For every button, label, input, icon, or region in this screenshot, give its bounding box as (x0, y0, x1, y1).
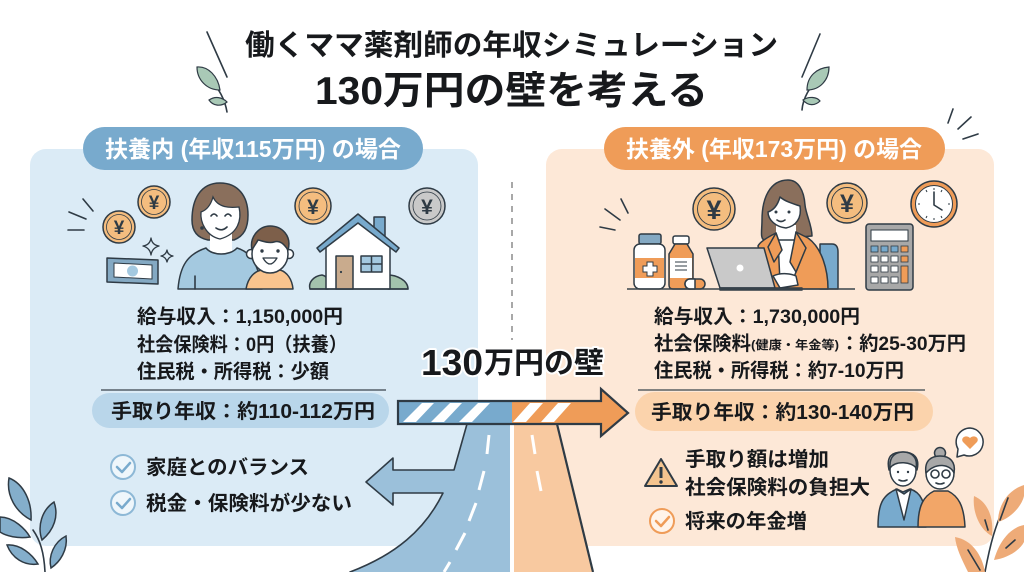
icon: medicine bottle with cross (634, 234, 665, 289)
illustration: right rays (600, 199, 628, 230)
heading pill: right: 扶養外 (年収173万円) の場合 (626, 136, 922, 162)
text block: left income details: 住民税・所得税：少額 (137, 361, 329, 383)
text block: right income details: 給与収入：1,730,000円 (654, 306, 860, 328)
icon: silver yen coin (409, 188, 445, 224)
icon: calculator (866, 224, 913, 290)
text block: right caution (685, 448, 870, 499)
text block: right caution: 手取り額は増加 (685, 448, 829, 471)
decoration: right foliage (955, 485, 1024, 572)
title: 働くママ薬剤師の年収シミュレーション (245, 29, 778, 62)
result pill: right take-home (635, 392, 933, 431)
icon: warning triangle (645, 459, 677, 486)
text block: left income details (137, 306, 347, 383)
result pill: right take-home: 手取り年収：約130-140万円 (651, 401, 914, 424)
result pill: left take-home: 手取り年収：約110-112万円 (111, 400, 375, 423)
text block: right income details: (健康・年金等) (751, 337, 839, 352)
list: left benefits (111, 455, 352, 515)
heading pill: left (83, 127, 423, 170)
heading pill: left: 扶養内 (年収115万円) の場合 (105, 136, 401, 162)
icon: laptop (707, 248, 802, 290)
illustration: elderly couple (878, 448, 965, 527)
icon: silver yen coin: ¥ (421, 196, 433, 219)
left divider (101, 389, 386, 391)
icon: check 2 (111, 491, 135, 515)
text: future pension: 将来の年金増 (685, 510, 807, 533)
result pill: left take-home (92, 393, 389, 428)
illustration: house (310, 214, 408, 289)
heading: 1.3 million yen wall: 130 (421, 342, 483, 383)
decoration: left foliage (0, 478, 66, 572)
illustration: child (246, 226, 294, 289)
text block: right income details: 社会保険料 (654, 333, 751, 355)
icon: heart speech bubble (956, 428, 983, 457)
text block: right income details (654, 306, 966, 382)
icon: banknote (107, 258, 158, 284)
text block: right caution: 社会保険料の負担大 (685, 476, 870, 499)
title (245, 29, 778, 113)
illustration: working woman (758, 180, 828, 289)
text: low taxes: 税金・保険料が少ない (146, 491, 352, 515)
heading: 1.3 million yen wall: 万円の壁 (484, 347, 604, 380)
text block: left income details: 社会保険料：0円（扶養） (137, 334, 347, 356)
icon: yen coin 2 (103, 211, 135, 243)
illustration: mother (178, 183, 262, 289)
icon: medicine bottle with label (669, 236, 693, 289)
illustration: left rays (68, 199, 93, 230)
text: balance: 家庭とのバランス (146, 456, 309, 479)
icon: yen coin 2: ¥ (114, 218, 125, 239)
icon: large yen coin (693, 188, 735, 230)
heading pill: right (604, 127, 945, 170)
panel: left background (30, 149, 478, 546)
decoration: rays top right (948, 109, 978, 139)
arrow: striped barrier (398, 389, 628, 436)
icon: large yen coin: ¥ (706, 195, 722, 225)
text block: right income details: ：約25-30万円 (840, 333, 966, 355)
heading: 1.3 million yen wall (421, 342, 604, 383)
road: left blue with branching arrow (350, 424, 510, 572)
center dashed divider (511, 182, 513, 340)
decoration: title leaves left (197, 32, 227, 112)
panel: right background (546, 149, 994, 546)
icon: yen coin 1: ¥ (149, 193, 160, 214)
title: 130万円の壁を考える (315, 70, 708, 113)
desk line (627, 288, 855, 290)
icon: check 1 (111, 455, 135, 479)
right divider (638, 389, 925, 391)
icon: yen coin 3: ¥ (307, 196, 319, 219)
icon: yen coin 3 (295, 188, 331, 224)
icon: clock (911, 181, 957, 227)
icon: yen coin: ¥ (840, 190, 854, 218)
illustration: chair (820, 244, 838, 289)
road: right orange (514, 424, 593, 572)
icon: sparkles (143, 238, 173, 262)
icon: yen coin (827, 183, 867, 223)
icon: orange check (650, 509, 674, 533)
icon: pill capsule (685, 279, 705, 289)
text block: left income details: 給与収入：1,150,000円 (137, 306, 343, 328)
decoration: title leaves right (802, 34, 829, 110)
icon: yen coin 1 (138, 186, 170, 218)
text block: right income details: 住民税・所得税：約7-10万円 (654, 360, 904, 382)
